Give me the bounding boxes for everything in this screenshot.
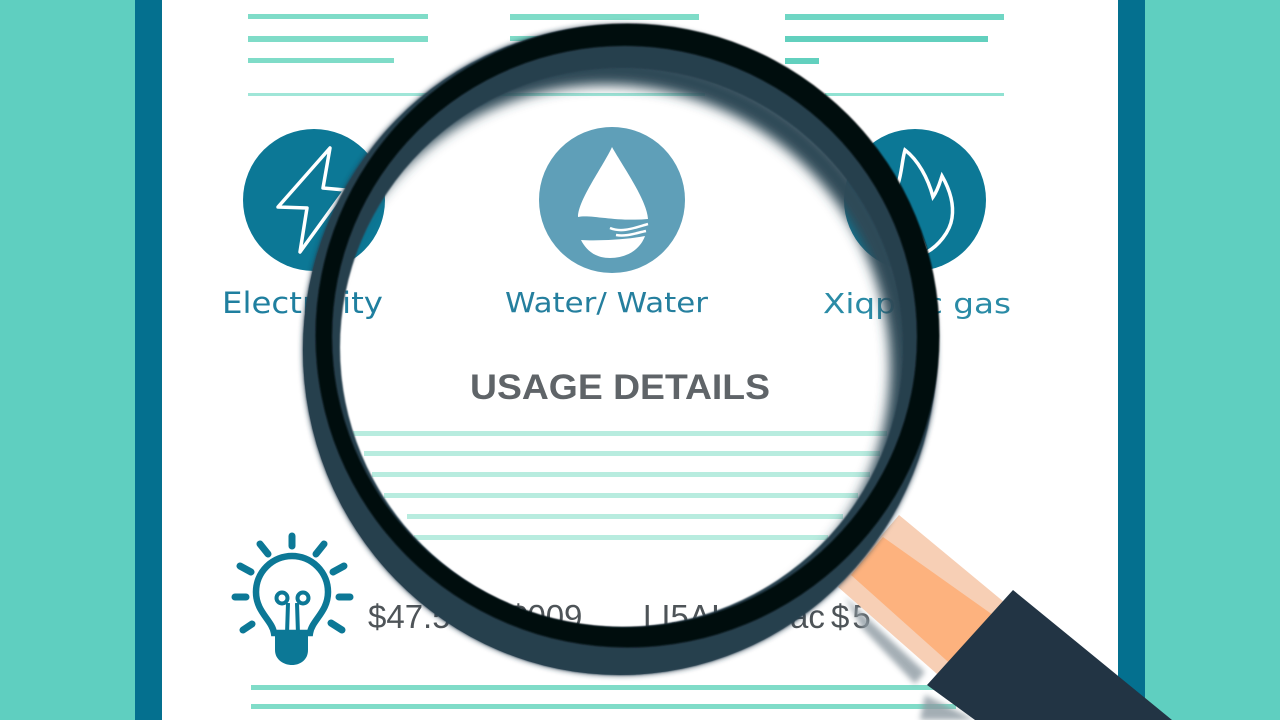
header text lines xyxy=(248,14,1004,96)
icon: water xyxy=(539,127,685,273)
amount text: $009 xyxy=(509,598,582,635)
handle grip xyxy=(927,590,1172,720)
amount text xyxy=(368,598,874,635)
amount text: $47.50 xyxy=(368,598,469,635)
magnifying glass handle xyxy=(838,515,1172,720)
label: electricity: Electricity xyxy=(222,286,383,320)
amount text: $5 xyxy=(831,598,874,635)
handle collar xyxy=(838,515,1010,681)
magnifying glass rim xyxy=(303,23,940,675)
amount text: LI5AI xyxy=(643,598,720,635)
amount text: ac xyxy=(790,598,825,635)
handle shadow xyxy=(845,597,975,720)
rim inner fade xyxy=(307,70,905,666)
heading: usage details: USAGE DETAILS xyxy=(470,368,770,407)
rim outer soft shadow xyxy=(309,31,931,669)
icon: electricity xyxy=(243,129,385,271)
label: water: Water/ Water xyxy=(505,286,709,319)
rim slate band xyxy=(303,25,937,675)
icon: gas flame xyxy=(844,129,986,271)
rim black band xyxy=(316,23,940,647)
label: gas: Xiqpaic gas xyxy=(823,287,1011,320)
document page xyxy=(135,0,1145,720)
usage detail lines xyxy=(353,431,887,540)
icon: light bulb xyxy=(235,536,350,665)
footer lines xyxy=(251,685,956,709)
